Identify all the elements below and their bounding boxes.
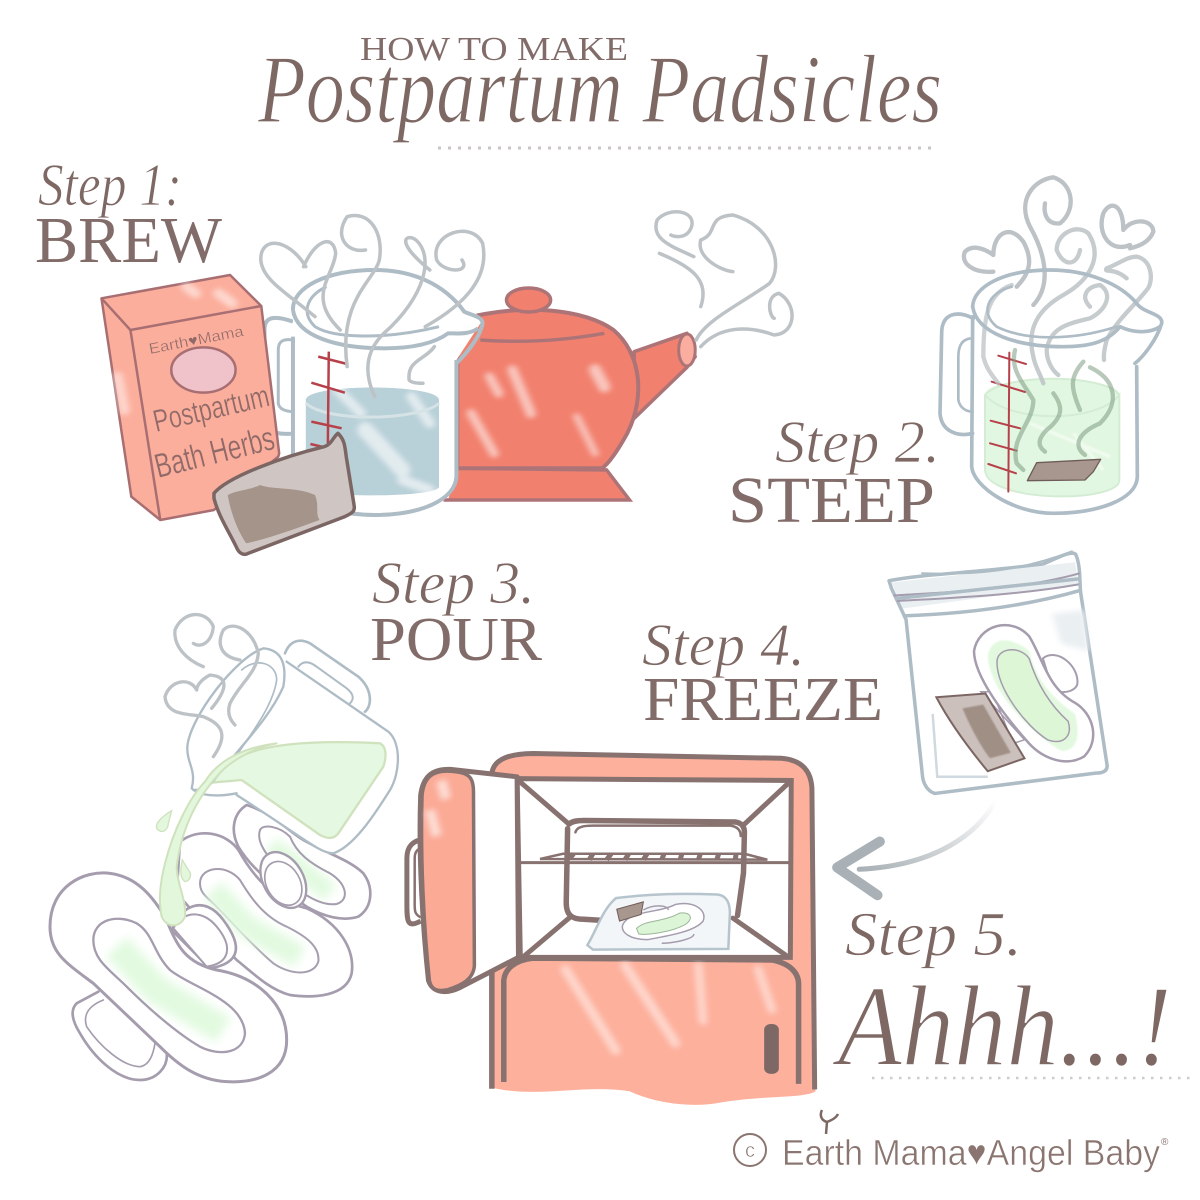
icon: jug steam <box>261 216 484 397</box>
heading: step 5 ahhh: Ahhh...! <box>832 963 1172 1091</box>
heading: step 4 freeze: FREEZE <box>643 666 883 734</box>
heading: step 4 freeze: Step 4. <box>642 612 805 678</box>
icon: herb box <box>101 275 279 520</box>
icon: tea sachet <box>214 433 354 554</box>
icon: sealed bag with pad <box>889 551 1107 793</box>
icon: measuring ruler <box>988 353 1026 492</box>
icon: steam <box>964 177 1153 470</box>
heading: step 2 steep: STEEP <box>728 464 935 537</box>
label: box text: Postpartum <box>150 378 273 439</box>
icon: fridge interior <box>517 779 791 957</box>
heading: step 4 freeze <box>642 612 883 734</box>
logo: Earth Mama Angel Baby: c <box>745 1140 755 1162</box>
heading: step 5 ahhh: Step 5. <box>845 901 1022 969</box>
heading: step 1 brew <box>35 152 223 277</box>
heading: step 3 pour <box>370 550 543 674</box>
icon: teapot steam <box>656 212 792 347</box>
icon: tilted jug <box>187 641 398 853</box>
icon: back pad <box>234 805 370 919</box>
heading: step 1 brew: Step 1: <box>38 152 182 218</box>
illustration: steeping jug <box>940 177 1162 513</box>
arrow: bag to fridge <box>837 801 996 895</box>
label: box text <box>148 323 278 486</box>
title: HOW TO MAKE <box>360 31 628 68</box>
icon: green stream and drops <box>156 743 277 925</box>
icon: steam <box>165 615 258 757</box>
illustration: brew scene <box>101 212 792 554</box>
heading: step 2 steep: Step 2. <box>775 409 940 475</box>
logo: Earth Mama Angel Baby: ® <box>1161 1137 1169 1148</box>
title: Postpartum Padsicles <box>257 36 942 144</box>
icon: jug handle <box>940 314 973 434</box>
heading: step 3 pour: Step 3. <box>372 550 535 616</box>
icon: middle pad <box>177 833 352 996</box>
icon: fridge body <box>492 753 816 1105</box>
logo: Earth Mama Angel Baby: Earth Mama♥Angel Baby <box>782 1132 1160 1173</box>
heading: step 1 brew: BREW <box>35 204 223 277</box>
icon: measuring jug with water <box>264 270 483 515</box>
icon: front pad <box>50 873 287 1082</box>
illustration: fridge, bag and arrow <box>407 551 1107 1105</box>
icon: green liquid <box>985 379 1119 496</box>
heading: step 3 pour: POUR <box>370 606 543 674</box>
icon: tea sachet in water <box>1027 459 1101 481</box>
icon: bag on shelf <box>587 894 730 950</box>
label: box text: Bath Herbs <box>151 419 278 486</box>
icon: fridge door <box>407 769 518 992</box>
heading: step 2 steep <box>728 409 940 537</box>
illustration: pouring on pads <box>50 615 398 1082</box>
label: box text: Earth♥Mama <box>148 323 246 358</box>
icon: teapot <box>444 288 695 500</box>
heading: step 5 ahhh <box>832 901 1190 1091</box>
logo: Earth Mama Angel Baby <box>734 1110 1169 1173</box>
icon: jug outline <box>972 270 1162 513</box>
